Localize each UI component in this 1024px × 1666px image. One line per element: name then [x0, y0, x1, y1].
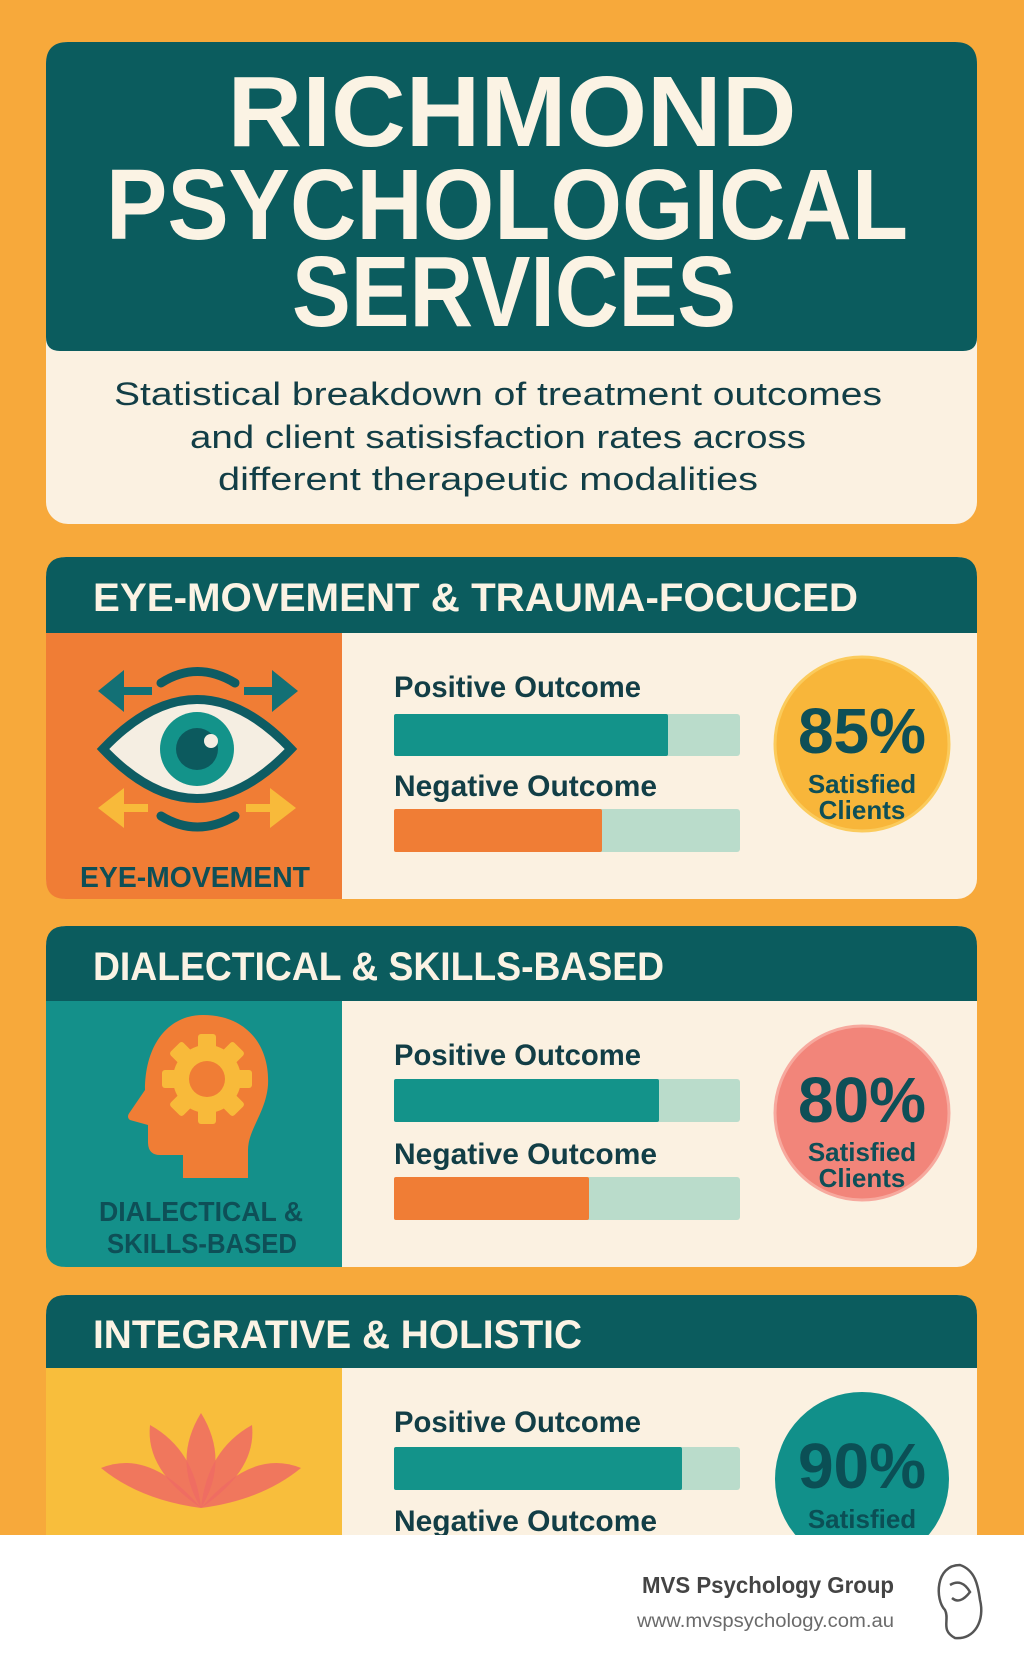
bar chart: Positive Outcome: [394, 1039, 641, 1072]
callout: 80%: [775, 1026, 949, 1200]
footer: [0, 1535, 1024, 1666]
subtitle: Statistical breakdown of treatment outcomes: [114, 376, 882, 412]
callout: 90%: 90%: [798, 1430, 926, 1502]
footer brand text: [636, 1572, 894, 1632]
heading: INTEGRATIVE & HOLISTIC: [93, 1313, 582, 1357]
subtitle: and client satisisfaction rates across: [190, 419, 806, 455]
heading: DIALECTICAL & SKILLS-BASED: [93, 945, 664, 989]
icon label: DIALECTICAL &: [99, 1196, 303, 1227]
icon: head with gear: [128, 1015, 268, 1178]
callout: 80%: Clients: [819, 1163, 905, 1193]
title: RICHMOND: [228, 56, 796, 168]
callout: 85%: 85%: [798, 695, 926, 767]
icon label: SKILLS-BASED: [107, 1228, 297, 1259]
bar chart: Negative Outcome: [394, 1138, 657, 1171]
callout: 85%: Satisfied: [808, 769, 916, 799]
bar chart: [394, 1039, 740, 1220]
callout: 90%: Satisfied: [808, 1504, 916, 1534]
bar chart: [394, 671, 740, 852]
bar chart: Negative Outcome: [394, 770, 657, 803]
bar chart: Positive Outcome: [394, 671, 641, 704]
panel: dialectical: [46, 926, 977, 1267]
subtitle: different therapeutic modalities: [218, 461, 758, 497]
bar chart: Negative Outcome: [394, 1505, 657, 1538]
heading: EYE-MOVEMENT & TRAUMA-FOCUCED: [93, 576, 858, 620]
bar chart: Positive Outcome: [394, 1406, 641, 1439]
panel: eye-movement: [46, 557, 977, 899]
icon label: [99, 1196, 303, 1259]
header panel: [46, 42, 977, 524]
icon label: EYE-MOVEMENT: [80, 862, 310, 894]
panel: integrative: [46, 1295, 977, 1566]
callout: 80%: Satisfied: [808, 1137, 916, 1167]
footer brand text: www.mvspsychology.com.au: [636, 1611, 894, 1632]
callout: 85%: Clients: [819, 795, 905, 825]
subtitle: [114, 376, 882, 497]
icon: logo: [939, 1565, 981, 1638]
bar chart: [394, 1406, 740, 1538]
callout: 85%: [775, 657, 949, 831]
title: [106, 56, 908, 348]
icon: eye: [98, 670, 298, 828]
callout: 90%: [775, 1392, 949, 1566]
title: PSYCHOLOGICAL: [106, 149, 908, 261]
footer brand text: MVS Psychology Group: [642, 1572, 894, 1598]
title: SERVICES: [292, 236, 736, 348]
icon: lotus: [101, 1413, 301, 1508]
callout: 80%: 80%: [798, 1064, 926, 1136]
